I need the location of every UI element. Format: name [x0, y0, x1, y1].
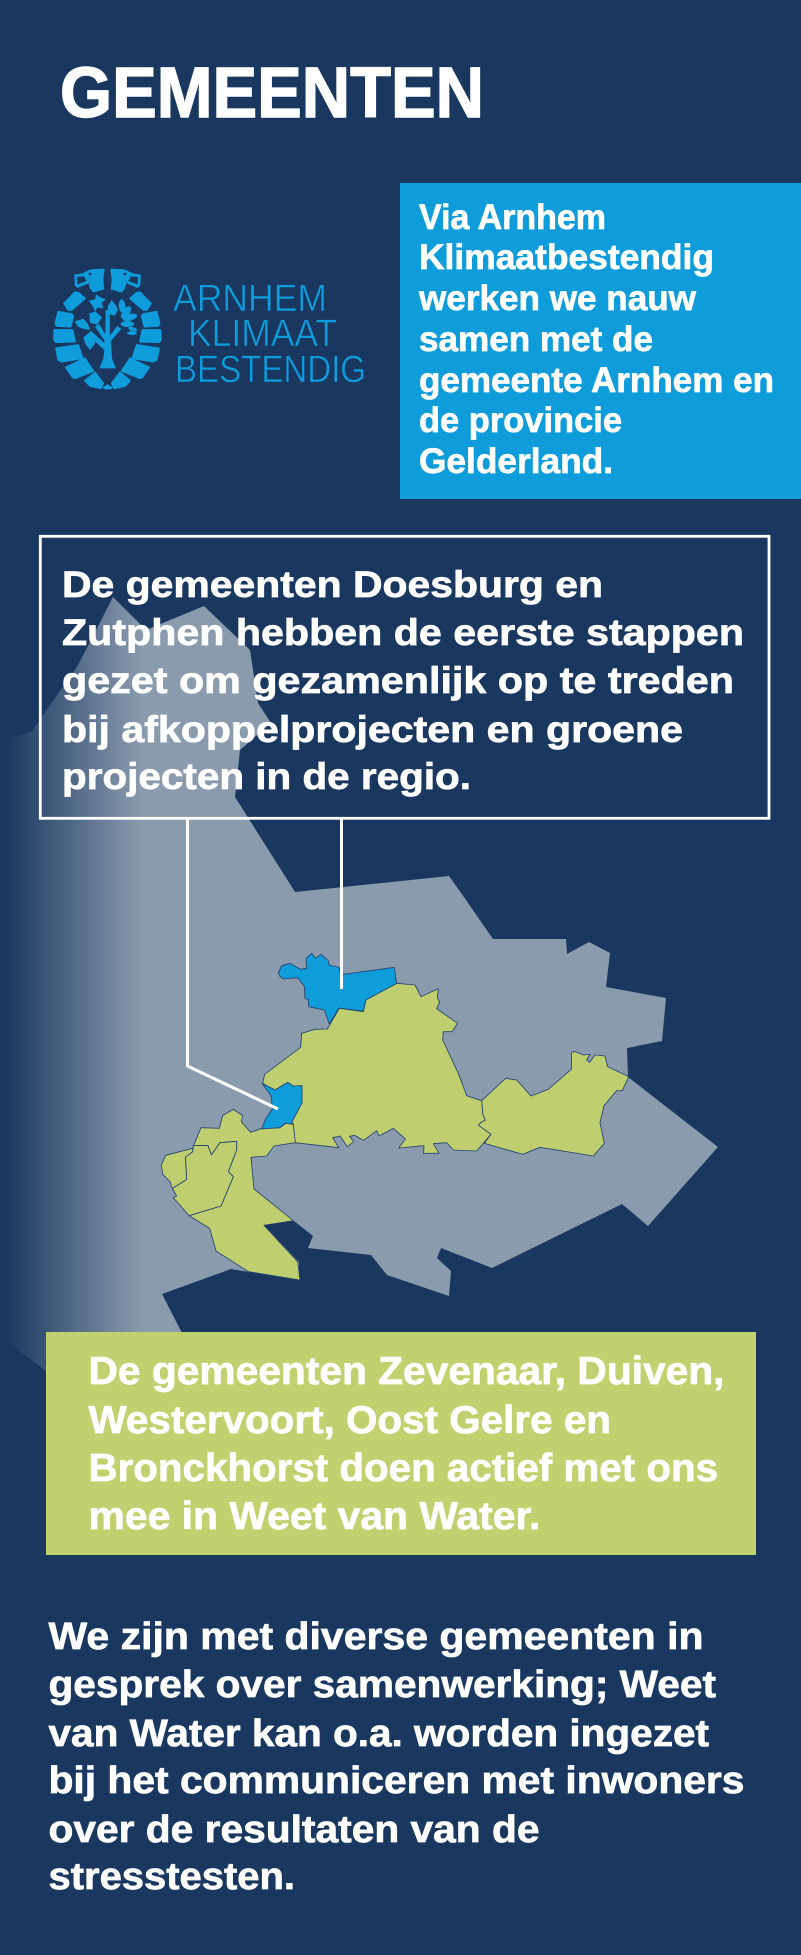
panel: Arnhem Klimaatbestendig callout	[400, 183, 801, 499]
panel: Doesburg and Zutphen callout: De gemeenten Doesburg en	[62, 563, 603, 605]
panel: Doesburg and Zutphen callout: bij afkoppelprojecten en groene	[62, 708, 683, 750]
municipality: Doesburg	[262, 1082, 302, 1129]
panel: Arnhem Klimaatbestendig callout: Gelderland.	[419, 442, 613, 481]
logo: Arnhem Klimaat Bestendig	[54, 269, 366, 391]
text block: other municipalities	[48, 1616, 744, 1898]
panel: Arnhem Klimaatbestendig callout: werken we nauw	[418, 279, 697, 318]
text block: other municipalities: van Water kan o.a. worden ingezet	[48, 1713, 709, 1755]
connector line to Doesburg	[188, 819, 278, 1109]
logo wordmark: ARNHEM	[173, 278, 327, 320]
panel: Arnhem Klimaatbestendig callout: gemeente Arnhem en	[419, 361, 774, 400]
panel: Arnhem Klimaatbestendig callout: de provincie	[419, 401, 622, 440]
region background shape	[9, 597, 718, 1400]
logo wordmark: KLIMAAT	[188, 313, 337, 355]
municipality: Oost Gelre	[479, 1051, 629, 1156]
text block: other municipalities: gesprek over samenwerking; Weet	[48, 1664, 716, 1706]
text block: other municipalities: over de resultaten van de	[48, 1809, 540, 1851]
map	[9, 597, 718, 1400]
panel: green municipalities callout: mee in Weet van Water.	[88, 1495, 540, 1538]
connector line to Zutphen	[340, 819, 343, 989]
municipalities in Weet van Water	[263, 983, 629, 1156]
panel: green municipalities callout	[46, 1332, 756, 1555]
municipalities: Zevenaar, Duiven, Westervoort	[161, 1109, 300, 1280]
text block: other municipalities: stresstesten.	[48, 1856, 295, 1898]
panel: Doesburg and Zutphen callout: gezet om gezamenlijk op te treden	[62, 659, 734, 701]
text block: other municipalities: bij het communiceren met inwoners	[48, 1760, 744, 1802]
panel: Arnhem Klimaatbestendig callout: Via Arnhem	[419, 198, 606, 237]
panel: Doesburg and Zutphen callout	[40, 536, 769, 818]
logo wordmark	[173, 278, 366, 391]
title: GEMEENTEN	[60, 54, 484, 133]
panel: green municipalities callout: De gemeenten Zevenaar, Duiven,	[88, 1350, 724, 1393]
panel: Doesburg and Zutphen callout: Zutphen hebben de eerste stappen	[62, 611, 744, 653]
panel: Doesburg and Zutphen callout: projecten in de regio.	[62, 755, 471, 797]
panel: Arnhem Klimaatbestendig callout: samen met de	[419, 320, 653, 359]
icon: eagles, ring and tree	[54, 269, 161, 389]
municipality: Bronckhorst	[263, 983, 491, 1153]
panel: green municipalities callout: Westervoort, Oost Gelre en	[88, 1399, 611, 1442]
text block: other municipalities: We zijn met diverse gemeenten in	[48, 1616, 704, 1658]
municipality: Zutphen	[278, 953, 397, 1024]
panel: green municipalities callout: Bronckhorst doen actief met ons	[88, 1447, 718, 1490]
logo wordmark: BESTENDIG	[175, 349, 366, 391]
panel: Arnhem Klimaatbestendig callout: Klimaatbestendig	[419, 238, 714, 277]
